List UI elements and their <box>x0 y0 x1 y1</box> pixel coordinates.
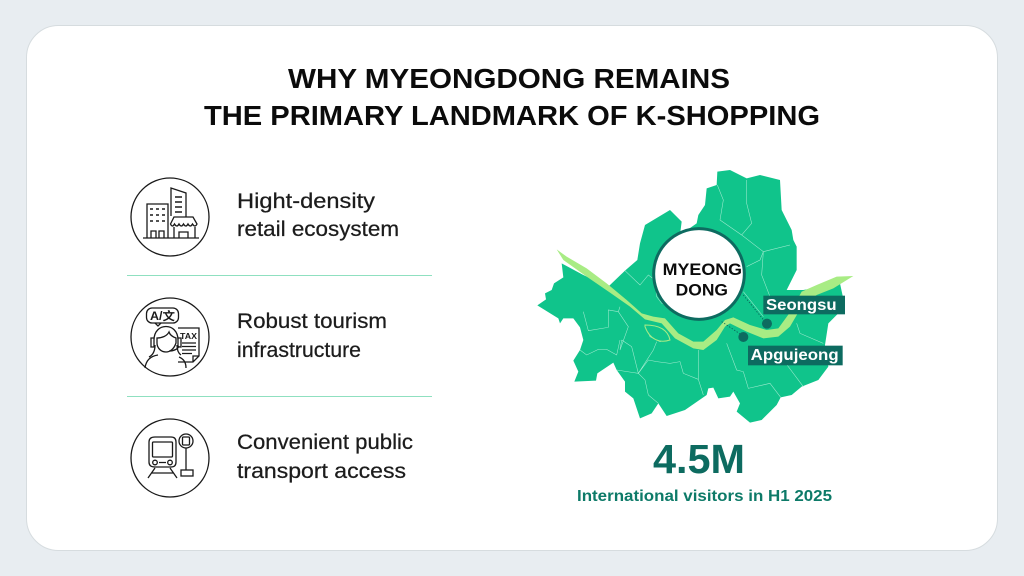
icon text: translation: A/文 <box>150 309 176 323</box>
divider 1 <box>127 275 432 276</box>
title: THE PRIMARY LANDMARK OF K-SHOPPING <box>204 100 820 131</box>
text: high-density retail ecosystem <box>237 190 399 241</box>
stat caption: International visitors in H1 2025 <box>577 488 832 505</box>
label: Seongsu: Seongsu <box>766 297 837 314</box>
divider 2 <box>127 396 432 397</box>
title: WHY MYEONGDONG REMAINS <box>288 63 730 94</box>
text: robust tourism infrastructure: infrastructure <box>237 339 361 362</box>
dotted leaders <box>722 295 765 335</box>
map landmass <box>537 170 845 423</box>
text: robust tourism infrastructure: Robust tourism <box>237 310 387 333</box>
icon: train and bus stop <box>131 419 209 497</box>
text: high-density retail ecosystem: Hight-density <box>237 190 376 213</box>
callout: Myeongdong circle <box>654 229 744 319</box>
label: Apgujeong: Apgujeong <box>751 347 839 364</box>
text: high-density retail ecosystem: retail ecosystem <box>237 218 399 241</box>
text: convenient public transport access: Convenient public <box>237 431 413 454</box>
Han river <box>557 249 853 350</box>
title <box>204 63 820 131</box>
text: convenient public transport access: transport access <box>237 460 406 483</box>
map: Seoul <box>537 170 853 423</box>
district borders <box>580 180 823 403</box>
icon text: tax: TAX <box>180 331 197 341</box>
marker: Seongsu <box>762 319 772 329</box>
callout: Myeongdong circle: DONG <box>676 280 728 299</box>
text: convenient public transport access <box>237 431 413 483</box>
stat: 4.5M: 4.5M <box>653 436 745 482</box>
icon: retail buildings <box>131 178 209 256</box>
callout: Myeongdong circle: MYEONG <box>663 260 742 279</box>
river loop <box>645 325 670 341</box>
marker: Apgujeong <box>738 332 748 342</box>
icon: tourism support with tax form <box>131 298 209 376</box>
text: robust tourism infrastructure <box>237 310 387 362</box>
